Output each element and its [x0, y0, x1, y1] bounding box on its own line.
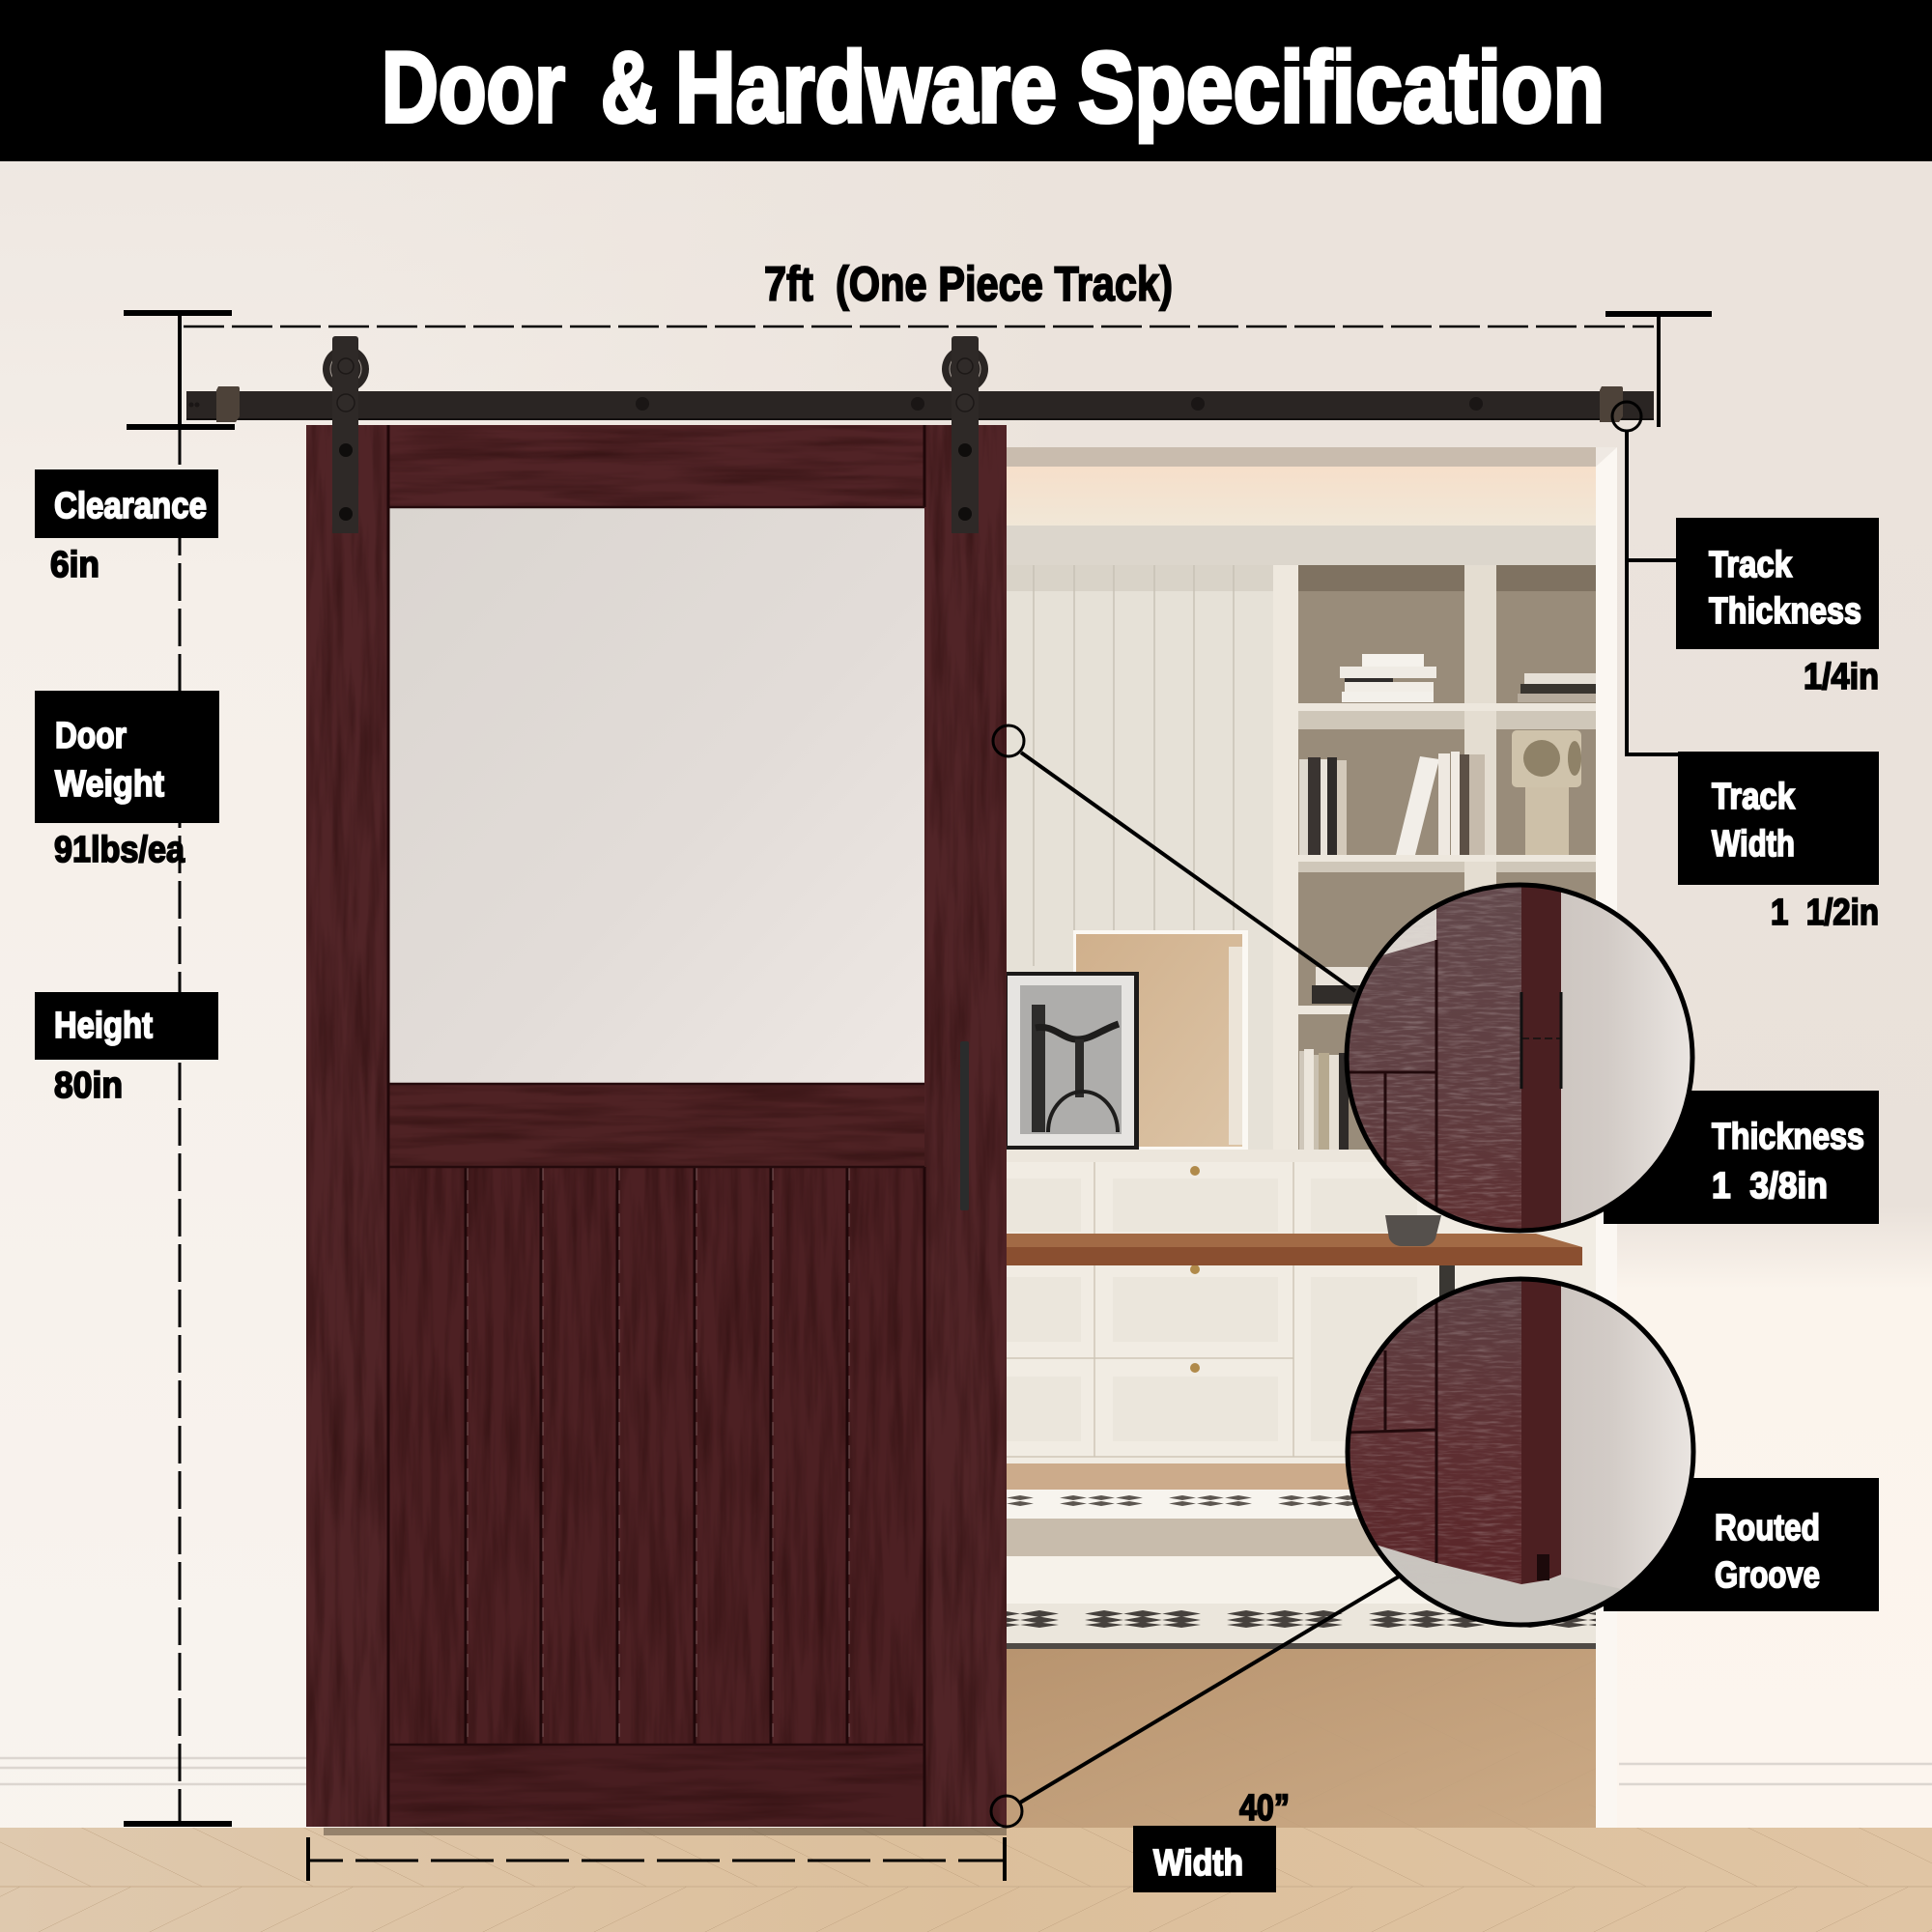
label: height: Height: [54, 1006, 153, 1046]
left stile: [306, 425, 388, 1827]
framed bicycle photo: [1007, 972, 1139, 1150]
label: door weight: [35, 691, 219, 823]
door width dimension line: [308, 1837, 1005, 1881]
barn door: [306, 425, 1007, 1827]
label: track width: Track: [1712, 777, 1796, 817]
sculpture: [1512, 730, 1581, 855]
crown moulding: [1007, 526, 1596, 565]
label: clearance: [35, 469, 218, 538]
books: [1299, 654, 1596, 1150]
value: track width: 1 1/2in: [1771, 893, 1879, 933]
label: height: [35, 992, 218, 1060]
callout marker: door edge: [993, 725, 1355, 991]
baseboards: [0, 1758, 1932, 1784]
track bolts: [189, 397, 1483, 411]
label: track thickness: [1676, 518, 1879, 649]
room floor: [1007, 1463, 1596, 1828]
right hanger: [942, 336, 988, 533]
label: routed groove: Routed: [1715, 1508, 1820, 1548]
wood grain: [306, 425, 1007, 1827]
label: thickness: Thickness: [1712, 1117, 1864, 1157]
title: Door: [382, 32, 565, 144]
door glass window: [389, 507, 924, 1084]
sliding track: [186, 391, 1654, 420]
door height dimension line: [124, 427, 232, 1824]
label: door weight: Door: [55, 716, 127, 756]
label: thickness: [1604, 1091, 1879, 1224]
title: &: [601, 32, 657, 144]
bookshelf: [1273, 565, 1596, 1154]
label: width: Width: [1153, 1843, 1243, 1884]
value: track thickness: 1/4in: [1804, 657, 1879, 697]
framed art beige: [1073, 930, 1248, 1150]
value: height: 80in: [54, 1065, 123, 1106]
top rail: [389, 426, 924, 507]
door handle: [960, 1041, 969, 1210]
title: [382, 32, 1605, 144]
label: width: [1133, 1826, 1276, 1892]
title: Hardware: [675, 32, 1057, 144]
label: track width: [1678, 752, 1879, 885]
door frame trim: [1596, 447, 1617, 1828]
value: width: 40”: [1239, 1788, 1290, 1829]
track length dimension line: [124, 313, 1712, 427]
track callout leader lines: [1612, 402, 1678, 754]
label: clearance: Clearance: [54, 486, 207, 526]
bottom rail: [389, 1744, 924, 1827]
wall panelling: [1007, 565, 1273, 1154]
cabinets: [1007, 1150, 1596, 1463]
rug: [1007, 1490, 1596, 1649]
label: track thickness: Thickness: [1709, 591, 1861, 632]
magnifier: routed groove: [1347, 1279, 1700, 1633]
header band: [0, 0, 1932, 161]
label: thickness: 1 3/8in: [1712, 1166, 1828, 1207]
middle rail: [389, 1084, 924, 1167]
left end stop: [216, 386, 240, 422]
soffit: [1007, 447, 1596, 467]
label: track width: Width: [1712, 824, 1795, 865]
lower plank panel: [389, 1167, 924, 1744]
left hanger: [323, 336, 369, 533]
label: routed groove: [1604, 1478, 1879, 1611]
doorway room scene: [1007, 447, 1596, 1828]
label: door weight: Weight: [55, 764, 164, 805]
right stile: [924, 425, 1007, 1827]
label: track thickness: Track: [1709, 545, 1793, 585]
callout marker: door bottom: [991, 1577, 1399, 1827]
ceiling light band: [1007, 467, 1596, 526]
plank grooves: [388, 425, 924, 1827]
title: Specification: [1078, 32, 1605, 144]
track length label: 7ft (One Piece Track): [764, 257, 1173, 311]
table: [1007, 1234, 1582, 1265]
value: door weight: 91lbs/ea: [54, 830, 185, 870]
magnifier: door thickness: [1347, 885, 1694, 1231]
label: routed groove: Groove: [1715, 1555, 1820, 1596]
floor: [0, 1828, 1932, 1932]
right end stop: [1600, 386, 1623, 422]
bowl: [1385, 1215, 1441, 1246]
value: clearance: 6in: [50, 545, 99, 585]
door shadow on floor: [324, 1828, 1007, 1835]
